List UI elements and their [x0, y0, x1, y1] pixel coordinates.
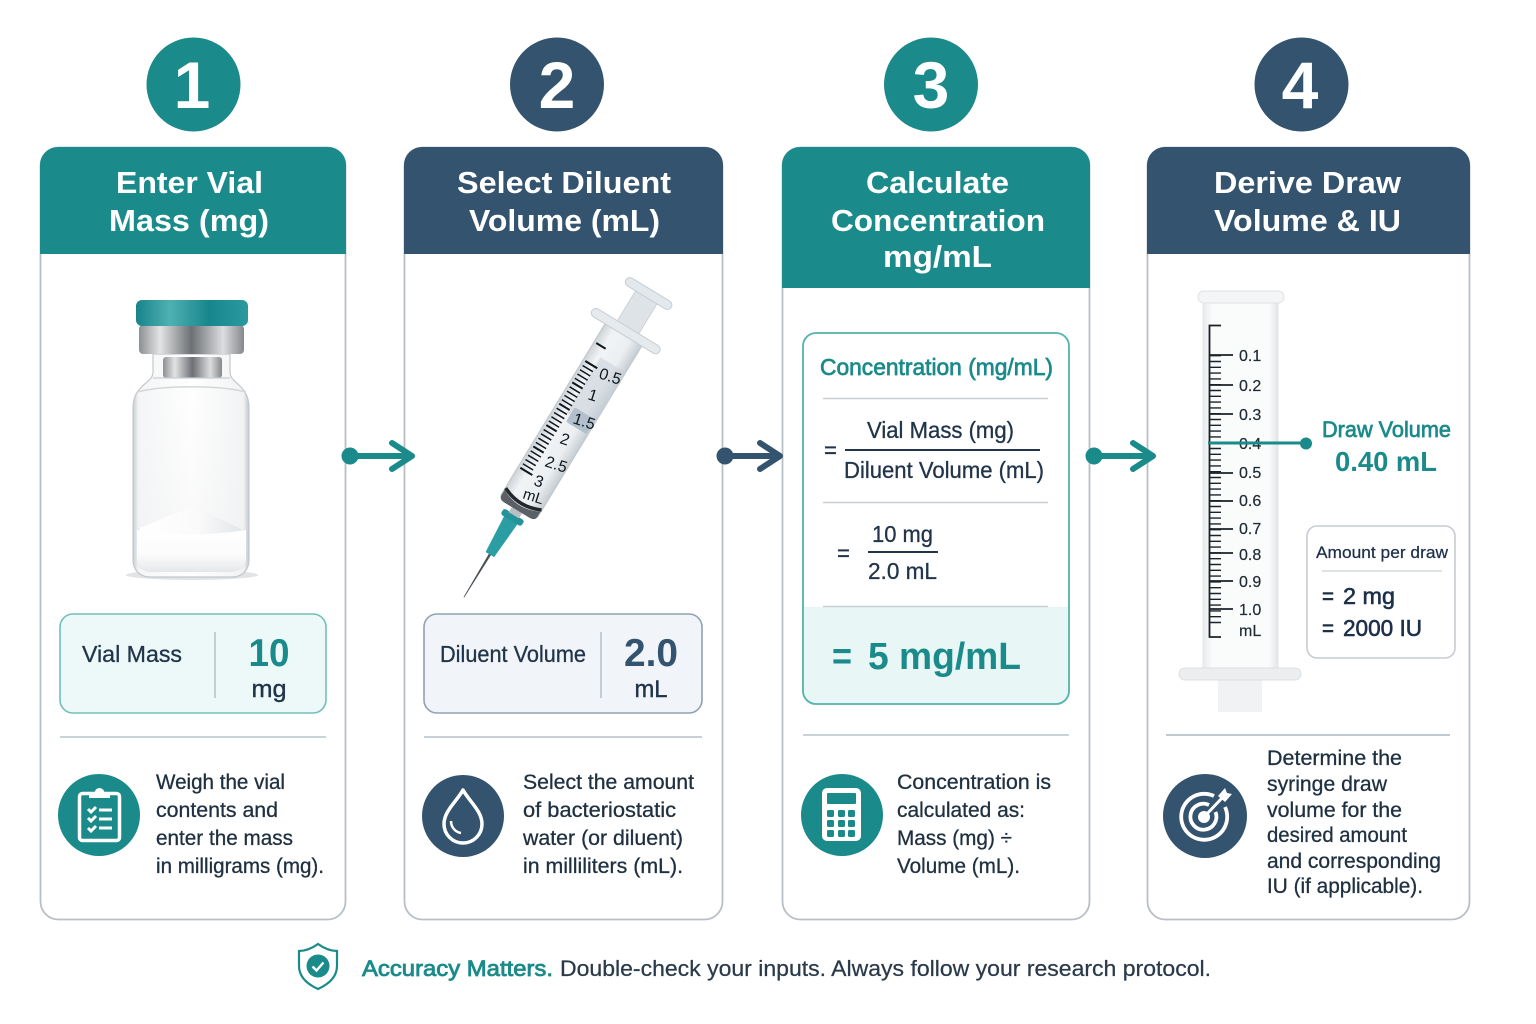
illustration: upright syringe barrel: 0.4 — [1239, 436, 1261, 453]
description: step 3: calculated as: — [897, 799, 1025, 822]
panel: step 2 select diluent volume — [404, 147, 723, 920]
header: enter vial mass — [40, 147, 346, 254]
header: calculate concentration: Calculate — [866, 165, 1009, 200]
formula: general: Diluent Volume (mL) — [844, 457, 1044, 483]
illustration: upright syringe barrel: 0.7 — [1239, 521, 1261, 538]
arrow: step 2 to 3 — [716, 443, 780, 469]
step number 4: 4 — [1282, 48, 1319, 122]
step number 4 — [1254, 38, 1348, 132]
formula: values: 10 mg — [872, 521, 933, 547]
description: step 4 — [1267, 747, 1441, 898]
formula: general: Vial Mass (mg) — [867, 417, 1014, 443]
formula: general — [824, 417, 1044, 483]
input: vial mass — [60, 614, 326, 713]
description: step 1: Weigh the vial — [156, 771, 285, 794]
icon: calculator — [801, 774, 883, 856]
panel: step 4 derive draw volume — [1147, 147, 1470, 920]
input: diluent volume: 2.0 — [624, 632, 678, 675]
illustration: upright syringe barrel — [1179, 291, 1301, 712]
step number 3 — [884, 38, 978, 132]
description: step 2: Select the amount — [523, 771, 694, 794]
illustration: tilted syringe: 3 — [532, 473, 546, 492]
description: step 1: in milligrams (mg). — [156, 855, 324, 878]
illustration: vial with powder — [126, 300, 258, 580]
icon: water drop — [422, 775, 504, 857]
header: select diluent volume: Select Diluent — [457, 165, 671, 200]
callout: draw volume: Draw Volume — [1322, 417, 1451, 442]
illustration: upright syringe barrel: mL — [1239, 623, 1261, 640]
illustration: tilted syringe: 0.5 — [597, 366, 623, 389]
illustration: upright syringe barrel: 0.5 — [1239, 465, 1261, 482]
illustration: tilted syringe: mL — [521, 486, 546, 508]
header: derive draw volume: Volume & IU — [1214, 203, 1401, 238]
input: diluent volume: Diluent Volume — [440, 641, 586, 667]
description: step 4: volume for the — [1267, 799, 1402, 822]
formula: values: 2.0 mL — [868, 558, 937, 584]
header: derive draw volume: Derive Draw — [1214, 165, 1402, 200]
description: step 3: Volume (mL). — [897, 855, 1020, 878]
formula card: Concentration (mg/mL) — [820, 354, 1053, 380]
formula: values — [837, 521, 938, 584]
footer note: Accuracy Matters. — [362, 956, 553, 981]
step number 3: 3 — [913, 48, 949, 122]
formula card — [803, 333, 1069, 704]
illustration: upright syringe barrel: 1.0 — [1239, 602, 1261, 619]
description: step 4: Determine the — [1267, 747, 1402, 770]
panel: step 1 enter vial mass — [40, 147, 346, 920]
card: amount per draw: = — [1322, 615, 1334, 641]
result: = — [832, 636, 852, 678]
callout: draw volume — [1322, 417, 1451, 477]
description: step 4: and corresponding — [1267, 850, 1441, 873]
illustration: tilted syringe — [430, 269, 685, 618]
panel: step 3 calculate concentration — [782, 147, 1090, 920]
card: amount per draw: 2 mg — [1343, 583, 1395, 609]
arrow: step 3 to 4 — [1086, 443, 1153, 469]
header: calculate concentration: Concentration — [831, 203, 1045, 238]
illustration: tilted syringe: 1 — [586, 387, 600, 406]
card: amount per draw — [1307, 526, 1455, 658]
icon: shield check — [299, 944, 337, 989]
icon: clipboard checklist — [58, 774, 140, 856]
input: diluent volume — [424, 614, 702, 713]
header: enter vial mass: Enter Vial — [116, 165, 263, 200]
step number 1 — [146, 38, 240, 132]
illustration: tilted syringe: 1.5 — [571, 411, 597, 434]
input: vial mass: Vial Mass — [82, 641, 182, 667]
illustration: upright syringe barrel: 0.1 — [1239, 348, 1261, 365]
marker: draw volume line — [1208, 438, 1312, 450]
header: derive draw volume — [1147, 147, 1470, 254]
icon: target with arrow — [1163, 774, 1247, 858]
description: step 2: in milliliters (mL). — [523, 855, 683, 878]
description: step 3 — [897, 771, 1051, 878]
illustration: upright syringe barrel: 0.2 — [1239, 378, 1261, 395]
header: select diluent volume: Volume (mL) — [469, 203, 660, 238]
input: vial mass: mg — [252, 676, 286, 703]
illustration: upright syringe barrel: 0.9 — [1239, 574, 1261, 591]
description: step 1: contents and — [156, 799, 278, 822]
card: amount per draw: = — [1322, 583, 1334, 609]
card: amount per draw: Amount per draw — [1316, 543, 1449, 562]
illustration: upright syringe barrel: 0.6 — [1239, 493, 1261, 510]
formula: values: = — [837, 540, 850, 566]
step number 2 — [510, 38, 604, 132]
callout: draw volume: 0.40 mL — [1335, 446, 1437, 477]
description: step 4: syringe draw — [1267, 773, 1388, 796]
header: calculate concentration: mg/mL — [883, 239, 992, 274]
footer note: Double-check your inputs. Always follow your research protocol. — [560, 956, 1211, 981]
input: diluent volume: mL — [634, 676, 668, 703]
arrow: step 1 to 2 — [342, 443, 412, 469]
description: step 2: of bacteriostatic — [523, 799, 676, 822]
step number 1: 1 — [174, 48, 210, 122]
illustration: upright syringe barrel: 0.8 — [1239, 547, 1261, 564]
description: step 1: enter the mass — [156, 827, 293, 850]
input: vial mass: 10 — [248, 632, 290, 675]
description: step 3: Mass (mg) ÷ — [897, 827, 1012, 850]
header: select diluent volume — [404, 147, 723, 254]
header: calculate concentration — [782, 147, 1090, 288]
illustration: tilted syringe: 2 — [558, 431, 572, 450]
step number 2: 2 — [539, 48, 575, 122]
description: step 1 — [156, 771, 324, 878]
formula: general: = — [824, 437, 837, 463]
result: 5 mg/mL — [868, 636, 1021, 678]
description: step 4: IU (if applicable). — [1267, 875, 1423, 898]
description: step 4: desired amount — [1267, 824, 1407, 847]
description: step 3: Concentration is — [897, 771, 1051, 794]
description: step 2: water (or diluent) — [522, 827, 683, 850]
card: amount per draw: 2000 IU — [1343, 615, 1422, 641]
illustration: tilted syringe: 2.5 — [543, 454, 569, 477]
illustration: upright syringe barrel: 0.3 — [1239, 407, 1261, 424]
header: enter vial mass: Mass (mg) — [109, 203, 269, 238]
description: step 2 — [522, 771, 694, 878]
